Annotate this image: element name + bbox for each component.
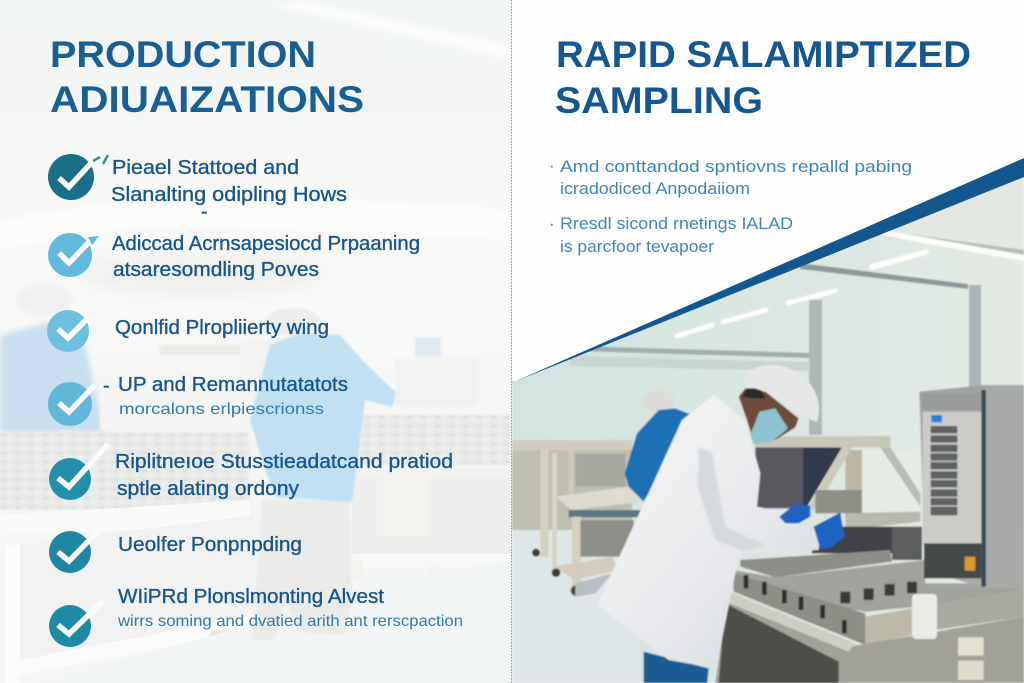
panel: right upper white area and photo — [512, 0, 1024, 683]
list item 3 — [47, 310, 329, 352]
white corner keep-out above band — [512, 0, 1024, 381]
heading: left title: ADIUAIZATIONS — [50, 79, 364, 120]
ceiling lights — [677, 232, 1024, 336]
back worker in blue — [625, 390, 692, 502]
left background worker — [0, 284, 105, 432]
left carts — [512, 440, 642, 597]
list item 7 — [49, 586, 463, 647]
list item 1: Slanalting odipling Hows — [111, 184, 347, 206]
instrument tower — [919, 385, 1024, 588]
main worker in white lab coat — [597, 365, 844, 683]
machine base and table — [715, 560, 1024, 683]
list item 1 — [48, 154, 347, 223]
heading: right title — [555, 34, 971, 121]
text block: right bullet 1: · — [549, 156, 555, 175]
heading: right title: RAPID SALAMIPTIZED — [556, 34, 971, 75]
text block: right bullet 1: Amd conttandod spntiovns repalld pabing — [560, 157, 912, 176]
text block: right bullet 1 — [549, 156, 912, 198]
central worker in light blue coat — [250, 308, 396, 640]
list item 4: UP and Remannutatatots — [118, 374, 348, 396]
list item 1: Pieael Stattoed and — [112, 157, 299, 179]
heading: left title: PRODUCTION — [50, 34, 316, 75]
diagonal blue band — [516, 158, 1024, 381]
text block: right bullet 2: is parcfoor tevapoer — [560, 237, 714, 256]
icon: check badge 1 — [48, 154, 108, 200]
icon: check badge 2 — [48, 233, 99, 277]
icon: check badge 4 — [48, 382, 95, 426]
floor of photo — [512, 530, 640, 683]
list item 7: wirrs soming and dvatied arith ant rerscpaction — [117, 613, 463, 630]
dotted centre divider — [510, 0, 512, 683]
machine frame with screen — [740, 436, 922, 577]
list item 2: Adiccad Acrnsapesiocd Prpaaning — [112, 233, 420, 255]
list item 6 — [49, 528, 302, 573]
icon: check badge 3 — [47, 310, 90, 352]
list item 5: Riplitneıoe Stusstieadatcand pratiod — [115, 451, 453, 473]
list item 2: atsaresomdling Poves — [113, 259, 319, 281]
list item 5: sptle alating ordony — [117, 478, 299, 500]
icon: check badge 7 — [49, 600, 104, 647]
list item 4: - — [103, 375, 110, 397]
photo: manufacturing lab scene — [512, 150, 1024, 683]
floor — [40, 560, 512, 683]
list item 4 — [48, 374, 348, 426]
text block: right bullet 2 — [549, 214, 793, 256]
list item 1: - — [201, 201, 208, 223]
icon: check badge 6 — [49, 528, 101, 573]
list item 5 — [49, 444, 453, 500]
pillars and ducts — [570, 230, 1024, 435]
list item 2 — [48, 233, 420, 281]
heading: left title — [50, 34, 364, 120]
text block: right bullet 1: icradodiced Anpodaiiom — [560, 179, 750, 198]
list item 6: Ueolfer Ponpnpding — [118, 534, 302, 556]
lab bench speckled row — [0, 415, 510, 683]
text block: right bullet 2: · — [549, 214, 555, 233]
icon: check badge 5 — [49, 444, 108, 500]
list item 7: WIiPRd Plonslmonting Alvest — [118, 586, 384, 608]
list item 3: Qonlfid Plropliierty wing — [115, 317, 329, 339]
heading: right title: SAMPLING — [555, 80, 763, 121]
panel: left faded lab photo background — [0, 0, 512, 683]
text block: right bullet 2: Rresdl sicond rnetings IALAD — [560, 214, 793, 233]
back shelf and window shapes — [100, 308, 478, 430]
list item 4: morcalons erlpiescrionss — [119, 401, 324, 418]
right table — [352, 468, 510, 600]
ceiling — [780, 150, 1024, 240]
